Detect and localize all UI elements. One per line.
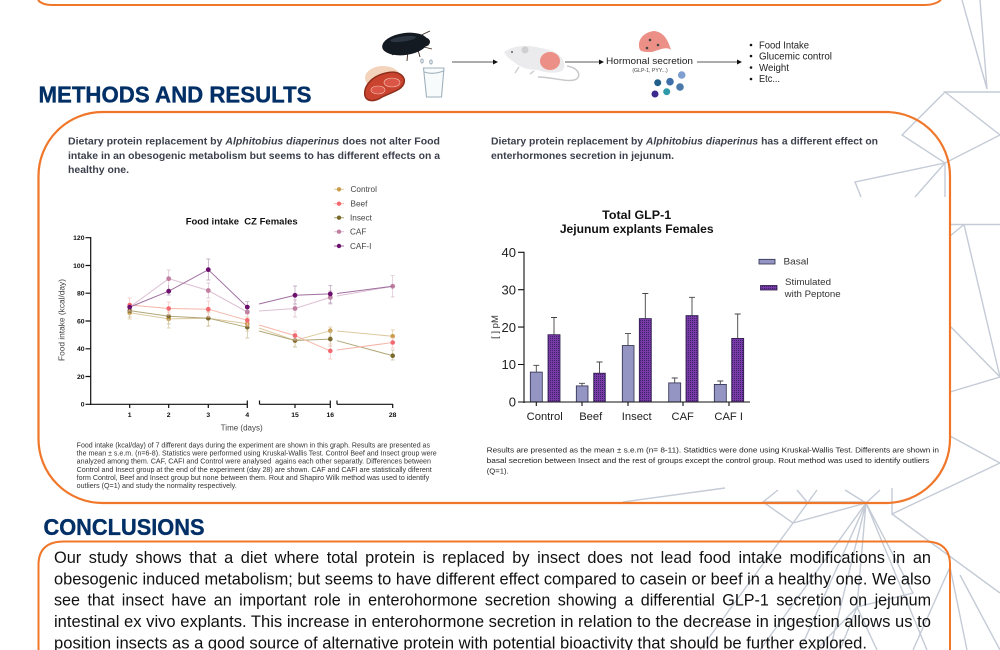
text: food intake finding: Dietary protein replacement by Alphitobius diaperinus does not alter Food <box>68 136 440 148</box>
text: line chart caption: the mean ± s.e.m. (n=6-8). Statistics were performed using Kruskal-Wallis Test. Control Beef and Insect group were <box>77 451 437 458</box>
icon: mouse <box>504 46 579 80</box>
list: outcomes: Etc... <box>759 74 780 85</box>
y axis values: 40 <box>77 346 85 353</box>
text: conclusions body: intestinal ex vivo explants. This increase in enterohormone secretion in relation to the decrease in ingestion allows us to <box>54 613 931 631</box>
bar chart: total GLP-1 <box>490 208 841 423</box>
axes <box>518 252 750 406</box>
x axis categories <box>527 411 743 423</box>
text: bar chart caption: Results are presented as the mean ± s.e.m (n= 8-11). Statidtics were done using Kruskal-Wallis Test. Differents are shown in <box>487 445 939 454</box>
list: outcomes: Glucemic control <box>759 52 832 62</box>
list: outcomes: Food Intake <box>759 40 810 52</box>
x axis categories: CAF I <box>714 411 743 423</box>
x axis values: 28 <box>389 412 397 419</box>
series: control <box>127 307 395 347</box>
legend: Stimulated <box>785 277 831 287</box>
legend: with Peptone <box>784 289 841 299</box>
text: bar chart caption: basal secretion between Insect and the rest of groups except the control group. Rout method was used to identify outliers <box>487 456 929 465</box>
y axis title: Food intake (kcal/day) <box>58 279 66 361</box>
chart title: Food intake CZ Females <box>186 216 298 228</box>
icon: intestine tissue <box>639 31 671 52</box>
legend: CAF-I <box>350 242 371 251</box>
text: hormone finding: enterhormones secretion in jejunum. <box>491 150 674 162</box>
legend: Control <box>350 185 377 194</box>
text: conclusions body: obesogenic induced metabolism; but seems to have different effect compared to casein or beef in a healthy one. We also <box>54 570 931 588</box>
icon: hormone dots <box>652 71 686 98</box>
icon: beetle <box>381 30 432 61</box>
y axis values: 0 <box>81 402 85 409</box>
panel: top box edge <box>38 0 941 5</box>
y axis title: [ ] pM <box>490 315 501 339</box>
label: hormonal secretion <box>606 56 693 74</box>
y axis values: 20 <box>502 320 516 335</box>
label: hormonal secretion: (GLP-1, PYY...) <box>632 68 668 74</box>
text: line chart caption: Food intake (kcal/day) of 7 different days during the experiment are shown in this graph. Results are presented as <box>77 442 430 450</box>
text: food intake finding: intake in an obesogenic metabolism but seems to has different effects on a <box>68 150 440 162</box>
text: hormone finding: Dietary protein replacement by Alphitobius diaperinus has a different effect on <box>491 136 878 148</box>
arrow: diet to mouse <box>452 60 498 64</box>
y axis values: 0 <box>509 394 516 410</box>
text: conclusions body: see that insect have an important role in enterohormone secretion showing a differential GLP-1 secretion on jejunum <box>54 592 931 610</box>
y axis values: 30 <box>502 282 516 297</box>
text: food intake finding <box>68 136 440 176</box>
text: conclusions body <box>54 549 931 650</box>
error bars <box>533 294 741 386</box>
chart title: Total GLP-1 <box>602 208 671 222</box>
y axis values: 20 <box>77 374 85 381</box>
label: hormonal secretion: Hormonal secretion <box>606 56 693 66</box>
legend: Basal <box>784 256 809 266</box>
x axis values: 15 <box>291 412 299 419</box>
y axis values: 80 <box>77 291 85 298</box>
x axis values: 16 <box>327 412 334 419</box>
axes <box>86 237 393 408</box>
y axis values: 10 <box>502 357 516 372</box>
icon: glass of water <box>421 59 444 97</box>
text: line chart caption: Control and Insect group at the end of the experiment (day 28) are shown. CAF and CAFI are statistically diferent <box>77 467 432 474</box>
text: line chart caption <box>77 442 437 490</box>
legend <box>334 185 377 251</box>
text: line chart caption: analyzed among them. CAF, CAFI and Control were analysed agains each other separatly. Differences between <box>77 459 431 466</box>
text: line chart caption: outliers (Q=1) and study the normality respectively. <box>77 483 237 490</box>
series: insect <box>127 304 395 360</box>
panel: conclusions <box>38 542 950 650</box>
list: outcomes: Weight <box>759 63 789 74</box>
text: bar chart caption <box>487 445 939 476</box>
legend: Beef <box>350 200 368 209</box>
text: bar chart caption: (Q=1). <box>487 467 509 476</box>
text: conclusions body: Our study shows that a diet where total protein is replaced by insect does not lead food intake modifications in an <box>54 549 931 567</box>
x axis values: 4 <box>245 412 249 419</box>
list: outcomes <box>750 40 832 85</box>
x axis categories: Beef <box>579 411 603 423</box>
legend: Insect <box>350 214 373 223</box>
x axis title: Time (days) <box>221 424 263 432</box>
stimulated bars <box>548 316 744 402</box>
x axis categories: Control <box>527 411 563 423</box>
y axis values <box>73 235 85 409</box>
arrow: mouse to hormones <box>565 60 604 64</box>
y axis values <box>502 245 516 410</box>
panel: methods and results <box>38 112 950 503</box>
heading: conclusions: CONCLUSIONS <box>44 514 204 540</box>
x axis categories: CAF <box>672 411 694 423</box>
line chart: food intake <box>58 185 397 432</box>
x axis values: 2 <box>167 412 171 419</box>
y axis values: 100 <box>73 263 85 270</box>
chart title <box>560 208 714 236</box>
y axis values: 60 <box>77 318 85 325</box>
x axis values: 1 <box>128 412 132 419</box>
x axis values <box>128 412 397 419</box>
text: food intake finding: healthy one. <box>68 164 129 176</box>
y axis values: 120 <box>73 235 85 242</box>
series: CAF-I <box>127 259 393 312</box>
series: CAF <box>130 270 395 317</box>
x axis values: 3 <box>206 412 210 419</box>
y axis values: 40 <box>502 245 516 260</box>
text: hormone finding <box>491 136 878 162</box>
basal bars <box>530 346 726 402</box>
chart title: Jejunum explants Females <box>560 222 714 236</box>
heading: methods and results: METHODS AND RESULTS <box>38 82 312 108</box>
legend <box>759 256 841 299</box>
legend: CAF <box>350 228 366 237</box>
text: line chart caption: form Control, Beef and Insect group but none between them. Rout and Shapiro Wilk method was used to identify <box>77 475 430 482</box>
x axis categories: Insect <box>622 411 653 423</box>
arrow: hormones to outcomes <box>697 60 742 64</box>
series: beef <box>127 298 395 359</box>
icon: meat <box>365 66 404 101</box>
